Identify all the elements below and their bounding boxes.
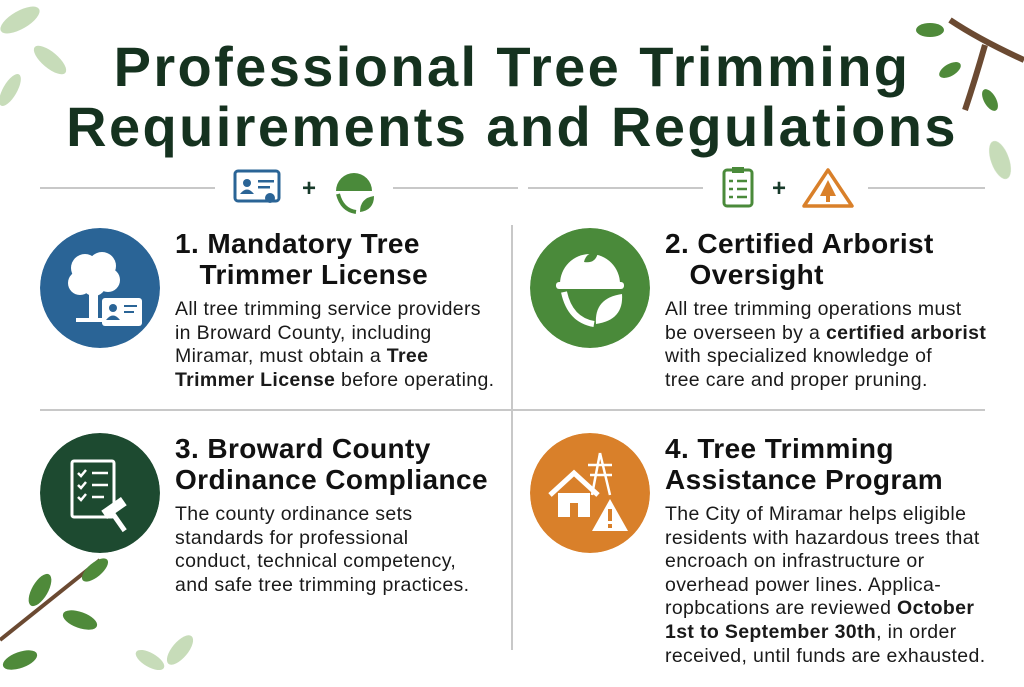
icon: tree with license — [40, 228, 160, 348]
heading: Oversight — [690, 259, 824, 290]
body: and safe tree trimming practices. — [175, 574, 469, 596]
icon: checklist with gavel — [40, 433, 160, 553]
panel 1 — [40, 228, 494, 391]
panel 2 — [530, 228, 986, 391]
body: encroach on infrastructure or — [665, 550, 924, 572]
body — [175, 503, 469, 596]
heading: 3. Broward County — [175, 433, 431, 464]
title: Requirements and Regulations — [66, 95, 958, 158]
body: conduct, technical competency, — [175, 550, 456, 572]
heading: Assistance Program — [665, 464, 943, 495]
title — [66, 35, 958, 158]
body: Miramar, must obtain a Tree — [175, 345, 428, 367]
heading: 4. Tree Trimming — [665, 433, 894, 464]
icon group right: checklist + warning — [722, 167, 854, 208]
body: standards for professional — [175, 527, 408, 549]
body: The City of Miramar helps eligible — [665, 503, 966, 525]
body: The county ordinance sets — [175, 503, 412, 525]
body: tree care and proper pruning. — [665, 369, 928, 391]
icon: helmet with leaf — [530, 228, 650, 348]
icon group left: license + helmet: + — [302, 175, 316, 202]
dividers — [40, 409, 985, 411]
heading: 1. Mandatory Tree — [175, 228, 420, 259]
body — [665, 503, 985, 667]
body: All tree trimming service providers — [175, 298, 481, 320]
heading: 2. Certified Arborist — [665, 228, 934, 259]
body: All tree trimming operations must — [665, 298, 962, 320]
icon group left: license + helmet — [234, 170, 374, 214]
body: Trimmer License before operating. — [175, 369, 494, 391]
body: ropbcations are reviewed October — [665, 597, 974, 619]
body: residents with hazardous trees that — [665, 527, 980, 549]
heading — [665, 228, 934, 290]
body — [665, 298, 986, 391]
panel 3 — [40, 433, 488, 596]
heading: Ordinance Compliance — [175, 464, 488, 495]
body: overhead power lines. Applica- — [665, 574, 941, 596]
panel 4 — [530, 433, 985, 667]
body: be overseen by a certified arborist — [665, 322, 986, 344]
body: 1st to September 30th, in order — [665, 621, 957, 643]
title: Professional Tree Trimming — [114, 35, 910, 98]
body: with specialized knowledge of — [665, 345, 932, 367]
body: received, until funds are exhausted. — [665, 645, 985, 667]
body — [175, 298, 494, 391]
heading — [175, 228, 428, 290]
heading: Trimmer License — [200, 259, 428, 290]
heading — [665, 433, 943, 495]
icon: house, pylon, warning — [530, 433, 650, 553]
heading — [175, 433, 488, 495]
body: in Broward County, including — [175, 322, 432, 344]
icon group right: checklist + warning: + — [772, 175, 786, 202]
